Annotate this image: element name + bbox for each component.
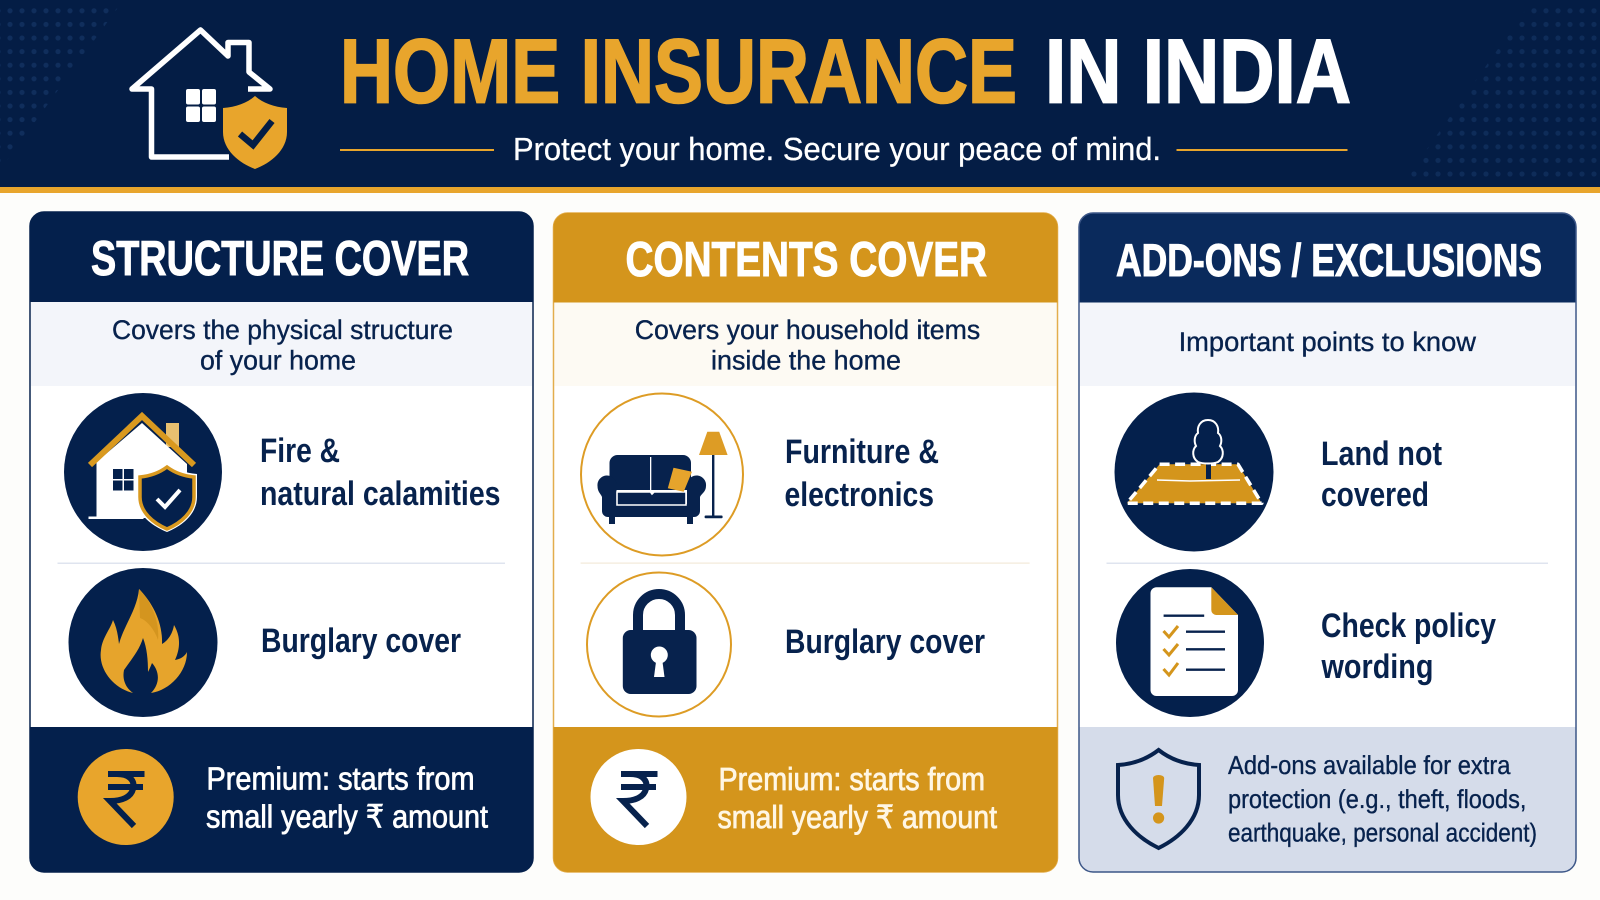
text: premium: Premium: starts from [206, 760, 474, 796]
text: fire and natural calamities [260, 432, 500, 513]
panel: contents cover [554, 213, 1058, 872]
icon: house and shield [64, 393, 222, 551]
text: premium [206, 760, 488, 834]
header banner [0, 0, 1600, 193]
title: HOME INSURANCE [340, 22, 1017, 122]
icon: warning shield [1118, 750, 1199, 848]
text block: contents description: Covers your household items [635, 315, 980, 345]
text block: structure description: Covers the physical structure [112, 315, 453, 345]
heading: add-ons and exclusions [1079, 213, 1576, 302]
icon: padlock [587, 572, 731, 716]
text: land not covered: covered [1321, 476, 1429, 514]
text: check policy wording: Check policy [1321, 607, 1496, 645]
text: land not covered [1321, 435, 1442, 514]
text: furniture and electronics: Furniture & [785, 433, 939, 471]
text: fire and natural calamities: Fire & [260, 432, 340, 470]
subtitle: Protect your home. Secure your peace of mind. [513, 131, 1161, 167]
icon: rupee coin [590, 749, 686, 845]
text: check policy wording: wording [1321, 648, 1434, 686]
panel: structure cover [30, 212, 533, 872]
text: premium: Premium: starts from [718, 761, 985, 797]
icon: policy document [1116, 569, 1264, 717]
text: add-ons note: earthquake, personal accident) [1228, 818, 1537, 848]
text: add-ons note [1228, 750, 1537, 848]
text block: structure description [31, 302, 532, 386]
text: add-ons note: protection (e.g., theft, floods, [1228, 784, 1526, 814]
heading: contents cover: CONTENTS COVER [626, 233, 987, 287]
text: premium: small yearly ₹ amount [718, 799, 997, 835]
heading: contents cover [554, 213, 1058, 302]
text: land not covered: Land not [1321, 435, 1442, 473]
heading: structure cover: STRUCTURE COVER [91, 232, 469, 286]
heading: structure cover [30, 212, 533, 302]
text: fire and natural calamities: natural calamities [260, 475, 500, 513]
text: add-ons note: Add-ons available for extra [1228, 750, 1511, 780]
premium footer [554, 727, 1058, 872]
text block: contents description [554, 302, 1056, 386]
title: IN INDIA [1045, 22, 1351, 122]
text block: important points: Important points to know [1179, 327, 1477, 357]
text: premium: small yearly ₹ amount [206, 798, 488, 834]
icon: land plot with tree [1114, 392, 1274, 552]
text block: structure description: of your home [200, 346, 356, 376]
text: check policy wording [1321, 607, 1496, 686]
icon: house with shield [132, 30, 287, 169]
text: burglary cover: Burglary cover [785, 623, 985, 661]
icon: flame [68, 568, 218, 717]
text: burglary cover: Burglary cover [261, 622, 461, 660]
icon: sofa and lamp [581, 394, 743, 556]
text: premium [718, 761, 997, 835]
add-ons footer [1079, 727, 1576, 872]
premium footer [30, 727, 533, 872]
text: furniture and electronics: electronics [784, 476, 934, 514]
text block: important points [1080, 302, 1575, 386]
text: furniture and electronics [784, 433, 939, 514]
text block: contents description: inside the home [711, 346, 901, 376]
icon: rupee coin [78, 749, 174, 845]
panel: add-ons and exclusions [1079, 213, 1576, 872]
